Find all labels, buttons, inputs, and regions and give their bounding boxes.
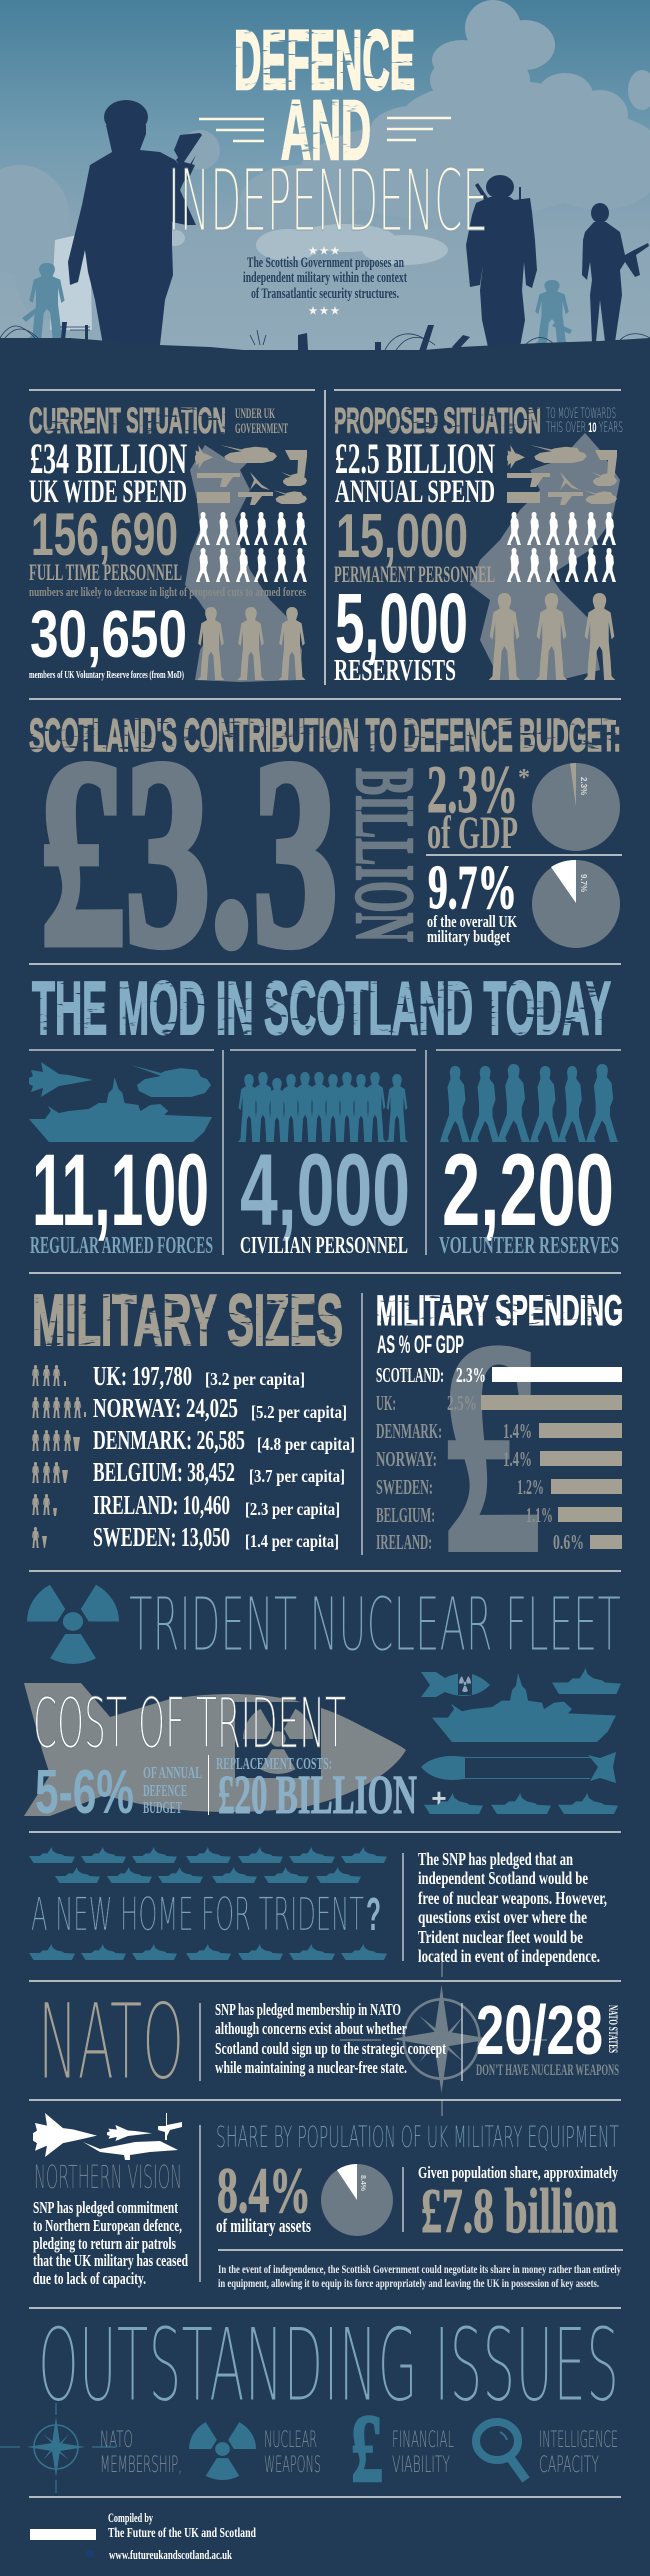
- stat: civilian personnel: 4,000: [240, 1133, 410, 1247]
- panel: current and proposed situation: GOVERNMENT: [235, 421, 288, 437]
- hero illustration: [0, 0, 650, 375]
- panel: nato: [29, 1962, 621, 2116]
- rows: military sizes: BELGIUM: 38,452: [93, 1457, 235, 1487]
- stat: 9.7% of budget: military budget: [427, 927, 510, 946]
- icon: missile: [421, 1752, 616, 1783]
- bar: norway: [376, 1447, 622, 1471]
- bar: belgium: BELGIUM:: [376, 1503, 435, 1527]
- stat: 5,000: 5,000: [335, 576, 468, 670]
- stat: 2.3% of gdp: of GDP: [427, 807, 518, 859]
- rows: military sizes: [1.4 per capita]: [245, 1531, 339, 1551]
- panel: outstanding issues: [0, 2306, 621, 2503]
- paragraph: SNP has pledged commitment: [33, 2198, 178, 2217]
- soldiers left: [197, 607, 306, 680]
- rows: military sizes: SWEDEN: 13,050: [93, 1522, 230, 1552]
- rows: military sizes: [5.2 per capita]: [251, 1402, 347, 1422]
- label: permanent personnel: PERMANENT PERSONNEL: [334, 562, 495, 587]
- big number: £3.3: [40, 704, 338, 1001]
- heading: NATO: [38, 1981, 184, 2103]
- heading: cost of trident: COST OF TRIDENT: [33, 1684, 346, 1764]
- panel: the mod in scotland today: [29, 966, 621, 1273]
- bar: norway: NORWAY:: [376, 1447, 437, 1471]
- stat: 34 billion: £34 BILLION: [30, 436, 187, 483]
- question mark: ?: [366, 1888, 381, 1940]
- rows: military sizes: [3.7 per capita]: [249, 1466, 345, 1486]
- hero intro text: The Scottish Government proposes an: [247, 255, 404, 271]
- paragraph: while maintaining a nuclear-free state.: [215, 2058, 407, 2077]
- stat: civilian personnel: [240, 1133, 410, 1259]
- icons: permanent personnel: [507, 512, 616, 582]
- stat: 2.3% of gdp: *: [518, 765, 530, 791]
- icon: small bomb: [421, 1672, 490, 1697]
- footer: credits: The Future of the UK and Scotland: [108, 2526, 256, 2541]
- stat: 20 billion: £20 BILLION: [218, 1764, 417, 1825]
- stat: 9.7% of budget: [427, 854, 518, 946]
- label: of annual defence budget: [143, 1763, 202, 1817]
- background soldiers: [22, 263, 572, 344]
- paragraph: [215, 2000, 446, 2077]
- label: intelligence capacity: [539, 2428, 618, 2478]
- icons: three small ships: [424, 1793, 618, 1814]
- rows: military sizes: NORWAY: 24,025: [93, 1393, 238, 1423]
- footer: logo block: [30, 2529, 96, 2557]
- paragraph: SNP has pledged membership in NATO: [215, 2000, 401, 2019]
- pie: 2.3%: [532, 763, 620, 851]
- title: AND: [281, 83, 371, 177]
- icon: small ship: [552, 1668, 621, 1694]
- stat: 8.4%: 8.4%: [217, 2155, 311, 2227]
- bar: uk: [376, 1391, 622, 1415]
- note: numbers likely to decrease: numbers are likely to decrease in light of proposed cuts to armed forces: [29, 584, 306, 599]
- bar: belgium: [376, 1503, 622, 1527]
- panel: northern vision: [33, 2113, 188, 2288]
- label: nuclear weapons: WEAPONS: [264, 2453, 321, 2478]
- sub heading: under uk government: [235, 406, 288, 437]
- label: of annual defence budget: DEFENCE: [143, 1781, 187, 1800]
- icons: ship rows: [29, 1847, 387, 1960]
- label: financial viability: FINANCIAL: [392, 2428, 454, 2453]
- title: [168, 13, 488, 251]
- rows: military sizes: [93, 1361, 355, 1552]
- stat: regular armed forces: REGULAR ARMED FORCES: [30, 1233, 213, 1259]
- bar: denmark: DENMARK:: [376, 1419, 442, 1443]
- stat: 156,690: 156,690: [31, 501, 178, 568]
- paragraph: to Northern European defence,: [33, 2216, 182, 2235]
- label: of annual defence budget: OF ANNUAL: [143, 1763, 202, 1782]
- stat: 9.7% of budget: of the overall UK: [427, 912, 518, 931]
- stat: 34 billion: UK WIDE SPEND: [29, 474, 187, 510]
- bar: sweden: 1.2%: [517, 1475, 544, 1499]
- label: of annual defence budget: BUDGET: [143, 1798, 182, 1817]
- bar: ireland: [376, 1530, 622, 1554]
- label: financial viability: VIABILITY: [392, 2453, 450, 2478]
- pie: 8.4%: 8.4%: [359, 2175, 366, 2192]
- hero intro text: ★★★: [309, 246, 341, 257]
- icons: full time personnel: [196, 512, 307, 582]
- bar: denmark: [376, 1419, 622, 1443]
- panel: a new home for trident: [29, 1832, 621, 1966]
- stat: 15,000: 15,000: [336, 502, 468, 571]
- person icons: [32, 1365, 86, 1548]
- bar: norway: 1.4%: [503, 1447, 532, 1471]
- ground: [0, 338, 650, 375]
- rows: military sizes: [3.2 per capita]: [205, 1369, 305, 1389]
- stat: 9.7% of budget: 9.7%: [428, 854, 517, 922]
- stat: 2.3% of gdp: [427, 751, 530, 859]
- weapons icons right: [507, 445, 617, 505]
- paragraph: Trident nuclear fleet would be: [418, 1927, 583, 1947]
- foreground soldier far right: [582, 203, 649, 342]
- rows: military sizes: DENMARK: 26,585: [93, 1425, 245, 1455]
- paragraph: Scotland could sign up to the strategic concept: [215, 2039, 446, 2058]
- panel: northern vision: NORTHERN VISION: [34, 2158, 182, 2196]
- rows: military sizes: [4.8 per capita]: [257, 1434, 355, 1454]
- hero intro text: independent military within the context: [243, 270, 407, 286]
- paragraph: although concerns exist about whether: [215, 2019, 407, 2038]
- label: nato membership: MEMBERSHIP,: [100, 2453, 182, 2478]
- foreground soldier left: [68, 100, 202, 345]
- sub heading: to move towards: [546, 406, 623, 436]
- label: replacement costs: REPLACEMENT COSTS:: [216, 1754, 332, 1773]
- bar: scotland: [376, 1363, 622, 1387]
- stat: regular armed forces: 11,100: [32, 1133, 209, 1247]
- foreground soldier right: [466, 175, 537, 347]
- panel: current and proposed situation: [29, 390, 623, 699]
- stat: 2.5 billion: ANNUAL SPEND: [335, 474, 495, 510]
- weapons icons left: [195, 445, 307, 505]
- panel: trident nuclear fleet: [22, 1571, 621, 1827]
- label: nato membership: [100, 2428, 182, 2478]
- bar: belgium: 1.1%: [526, 1503, 553, 1527]
- barbed wire and posts: [0, 326, 650, 352]
- paragraph: [418, 1849, 607, 1966]
- icon: magnifying glass: [476, 2422, 526, 2480]
- hero intro text: [243, 246, 407, 317]
- label: nuclear weapons: NUCLEAR: [264, 2428, 317, 2453]
- icons: jet, tank and ship: [29, 1062, 212, 1142]
- icon: walking reservists: [440, 1064, 618, 1142]
- bar: ireland: IRELAND:: [376, 1530, 432, 1554]
- label: full time personnel: FULL TIME PERSONNEL: [29, 560, 182, 585]
- bar: denmark: 1.4%: [503, 1419, 532, 1443]
- paragraph: that the UK military has ceased: [33, 2251, 188, 2270]
- label: reservists: RESERVISTS: [334, 652, 456, 687]
- plus sign: +: [431, 1783, 447, 1813]
- stat: 20/28: 20/28: [476, 1991, 603, 2069]
- uk map: [185, 445, 302, 682]
- stat: 2.5 billion: £2.5 BILLION: [335, 436, 495, 483]
- stat: civilian personnel: CIVILIAN PERSONNEL: [240, 1233, 408, 1259]
- heading: current situation: CURRENT SITUATION: [29, 400, 226, 441]
- icon: big warship: [432, 1673, 616, 1742]
- note text: [218, 2262, 621, 2290]
- icon: pound sign: £: [351, 2395, 383, 2503]
- panel: military sizes: [32, 1281, 362, 1555]
- stat: regular armed forces: [30, 1133, 213, 1259]
- icon: radiation: [22, 1582, 124, 1664]
- footer: credits: [108, 2510, 256, 2562]
- footer: credits: www.futureukandscotland.ac.uk: [109, 2547, 233, 2562]
- bar: scotland: 2.3%: [456, 1363, 486, 1387]
- panel: military spending: [376, 1278, 623, 1617]
- clouds: [0, 0, 650, 320]
- label: nato membership: NATO: [100, 2428, 133, 2453]
- panel: scotland's contribution: [29, 704, 622, 1001]
- panel: scotland's contribution: BILLION: [338, 768, 431, 942]
- note: voluntary reserve: members of UK Voluntary Reserve forces (from MoD): [29, 669, 184, 681]
- rows: military sizes: UK: 197,780: [93, 1361, 192, 1391]
- icons: aircraft: [33, 2113, 182, 2160]
- heading: MILITARY SIZES: [32, 1281, 343, 1361]
- paragraph: pledging to return air patrols: [33, 2234, 176, 2253]
- icon: crowd of civilians: [238, 1072, 408, 1142]
- heading: A NEW HOME FOR TRIDENT: [31, 1888, 364, 1941]
- paragraph: questions exist over where the: [418, 1907, 587, 1927]
- pie: 9.7%: [532, 860, 620, 948]
- icon: nato compass: [340, 1962, 547, 2116]
- hero intro text: ★★★: [309, 306, 341, 317]
- bar: sweden: SWEDEN:: [376, 1475, 433, 1499]
- icon: radiation: [185, 2420, 260, 2480]
- pie: 2.3%: 2.3%: [579, 777, 588, 795]
- icon: nato: [0, 2403, 116, 2493]
- rows: military sizes: [2.3 per capita]: [245, 1499, 340, 1519]
- sub heading: to move towards: THIS OVER 10 YEARS: [546, 419, 623, 436]
- bar: scotland: SCOTLAND:: [376, 1363, 444, 1387]
- label: nato states: NATO STATES: [606, 2005, 621, 2053]
- title: DEFENCE: [234, 13, 415, 107]
- paragraph: [33, 2198, 188, 2288]
- label: intelligence capacity: CAPACITY: [539, 2453, 599, 2478]
- rows: military sizes: IRELAND: 10,460: [93, 1490, 230, 1520]
- bar: uk: 2.5%: [447, 1391, 477, 1415]
- label: financial viability: [392, 2428, 454, 2478]
- hero intro text: of Transatlantic security structures.: [251, 286, 399, 302]
- pie: 9.7%: 9.7%: [579, 874, 588, 892]
- bar: sweden: [376, 1475, 622, 1499]
- subheading: AS % OF GDP: [377, 1331, 464, 1359]
- panel: share by population: [29, 2120, 623, 2308]
- bar: ireland: 0.6%: [553, 1530, 584, 1554]
- bomb illustration: [24, 1683, 406, 1816]
- label: nuclear weapons: [264, 2428, 321, 2478]
- stat: 5-6%: 5-6%: [35, 1758, 134, 1827]
- scotland map: [470, 433, 620, 680]
- paragraph: due to lack of capacity.: [33, 2269, 146, 2288]
- footer: credits: Compiled by: [108, 2510, 153, 2525]
- stat: 34 billion: [29, 436, 187, 510]
- stat: 30,650: 30,650: [30, 597, 187, 672]
- sub heading: under uk government: UNDER UK: [235, 406, 275, 422]
- stat: 2.3% of gdp: 2.3%: [427, 751, 518, 827]
- soldiers right: [489, 593, 615, 680]
- pie: 8.4%: [321, 2164, 393, 2236]
- stat: 2.5 billion: [335, 436, 495, 510]
- big pound sign: £: [441, 1278, 543, 1617]
- paragraph: The SNP has pledged that an: [418, 1849, 573, 1869]
- bar: uk: UK:: [376, 1391, 396, 1415]
- label: of military assets: of military assets: [216, 2216, 311, 2237]
